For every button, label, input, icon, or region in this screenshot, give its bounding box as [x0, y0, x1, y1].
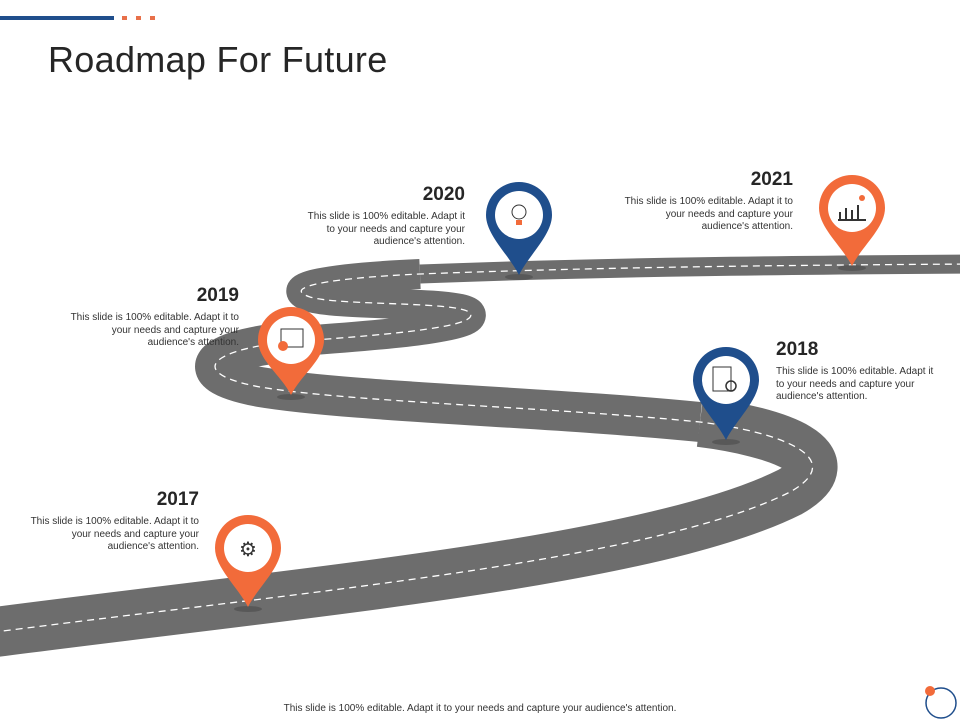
- text 2017: 2017: [157, 489, 199, 510]
- text 2017: This slide is 100% editable. Adapt it to: [31, 516, 199, 527]
- text 2021: 2021: [751, 169, 793, 190]
- text 2018: to your needs and capture your: [776, 378, 914, 390]
- text 2018: [776, 339, 934, 402]
- text 2021: your needs and capture your: [666, 208, 793, 220]
- text 2020: 2020: [423, 184, 465, 205]
- text 2017: [30, 489, 199, 552]
- text 2020: audience's attention.: [374, 236, 465, 247]
- text 2019: audience's attention.: [148, 337, 239, 348]
- text 2019: your needs and capture your: [112, 324, 239, 336]
- text 2020: to your needs and capture your: [327, 224, 465, 234]
- pin 2018: [693, 347, 759, 445]
- pin 2020: [486, 182, 552, 280]
- pin 2019: [258, 307, 324, 400]
- text 2018: audience's attention.: [776, 391, 867, 402]
- corner logo: [925, 686, 957, 719]
- text 2020: This slide is 100% editable. Adapt it: [308, 211, 465, 222]
- text 2017: your needs and capture your: [72, 528, 199, 540]
- pin 2017: ⚙: [239, 539, 257, 561]
- text 2017: audience's attention.: [108, 541, 199, 552]
- pin 2021: [819, 175, 885, 271]
- text 2021: audience's attention.: [702, 221, 793, 232]
- text 2018: This slide is 100% editable. Adapt it: [776, 366, 933, 377]
- text 2021: [624, 169, 793, 232]
- text 2019: [70, 285, 239, 348]
- header dots: [122, 16, 156, 20]
- header bar: [0, 16, 114, 20]
- text 2021: This slide is 100% editable. Adapt it to: [625, 196, 793, 207]
- pin 2017: [215, 515, 281, 612]
- text 2020: [308, 184, 465, 247]
- title: Roadmap For Future: [48, 39, 388, 80]
- text 2019: This slide is 100% editable. Adapt it to: [71, 312, 239, 323]
- footer text: This slide is 100% editable. Adapt it to your needs and capture your audience's attention.: [284, 703, 676, 714]
- text 2019: 2019: [197, 285, 239, 306]
- text 2018: 2018: [776, 339, 818, 360]
